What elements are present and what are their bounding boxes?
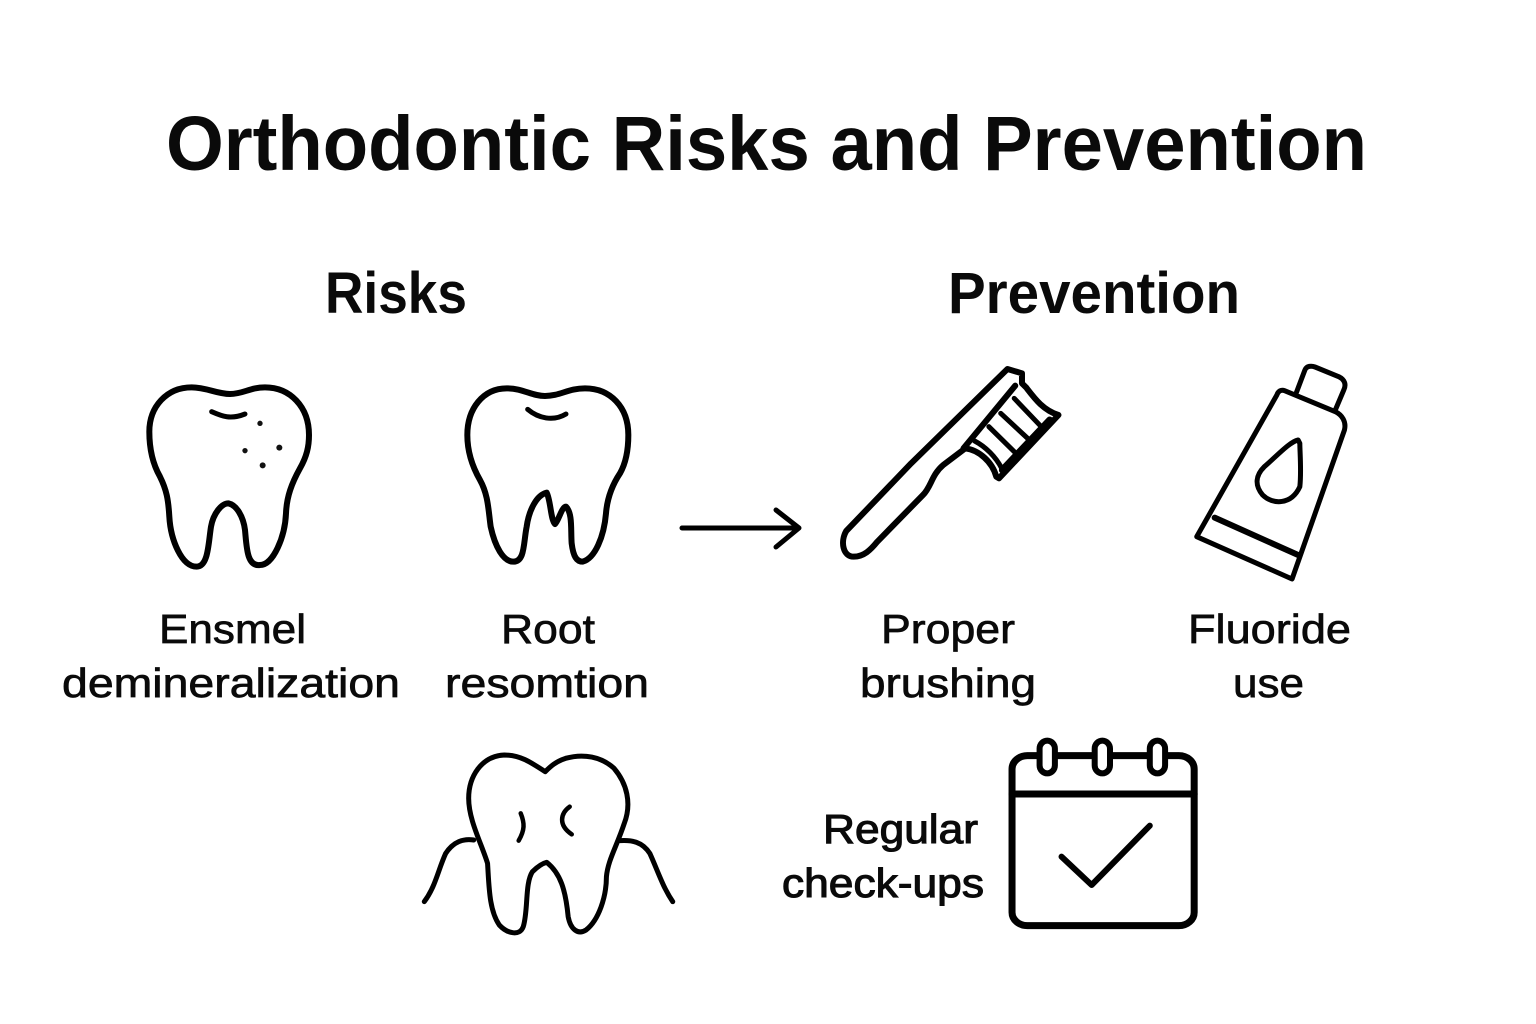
label: regular check-ups: check-ups (782, 860, 984, 906)
title: Orthodontic Risks and Prevention (166, 101, 1367, 187)
icon: fluoride toothpaste tube (1197, 366, 1345, 579)
label: enamel demineralization: demineralization (62, 660, 400, 706)
label: regular check-ups (782, 806, 984, 906)
label: root resorption (445, 606, 649, 706)
label: fluoride use: Fluoride (1188, 606, 1351, 652)
label: proper brushing (860, 606, 1036, 706)
label: enamel demineralization: Ensmel (159, 606, 306, 652)
label: proper brushing: brushing (860, 660, 1036, 706)
label: root resorption: Root (501, 606, 596, 652)
label: regular check-ups: Regular (823, 806, 978, 852)
heading: prevention: Prevention (948, 261, 1240, 326)
label: fluoride use (1188, 606, 1351, 706)
label: proper brushing: Proper (881, 606, 1015, 652)
icon: tooth with root resorption (467, 388, 628, 562)
heading: risks: Risks (325, 261, 467, 326)
label: root resorption: resomtion (445, 660, 649, 706)
icon: tooth with enamel spots (149, 387, 309, 567)
icon: toothbrush (843, 369, 1058, 557)
label: fluoride use: use (1233, 660, 1304, 706)
icon: calendar with check mark (1012, 741, 1194, 926)
icon: tooth with gum recession (424, 755, 673, 933)
label: enamel demineralization (62, 606, 400, 706)
arrow (682, 510, 799, 547)
